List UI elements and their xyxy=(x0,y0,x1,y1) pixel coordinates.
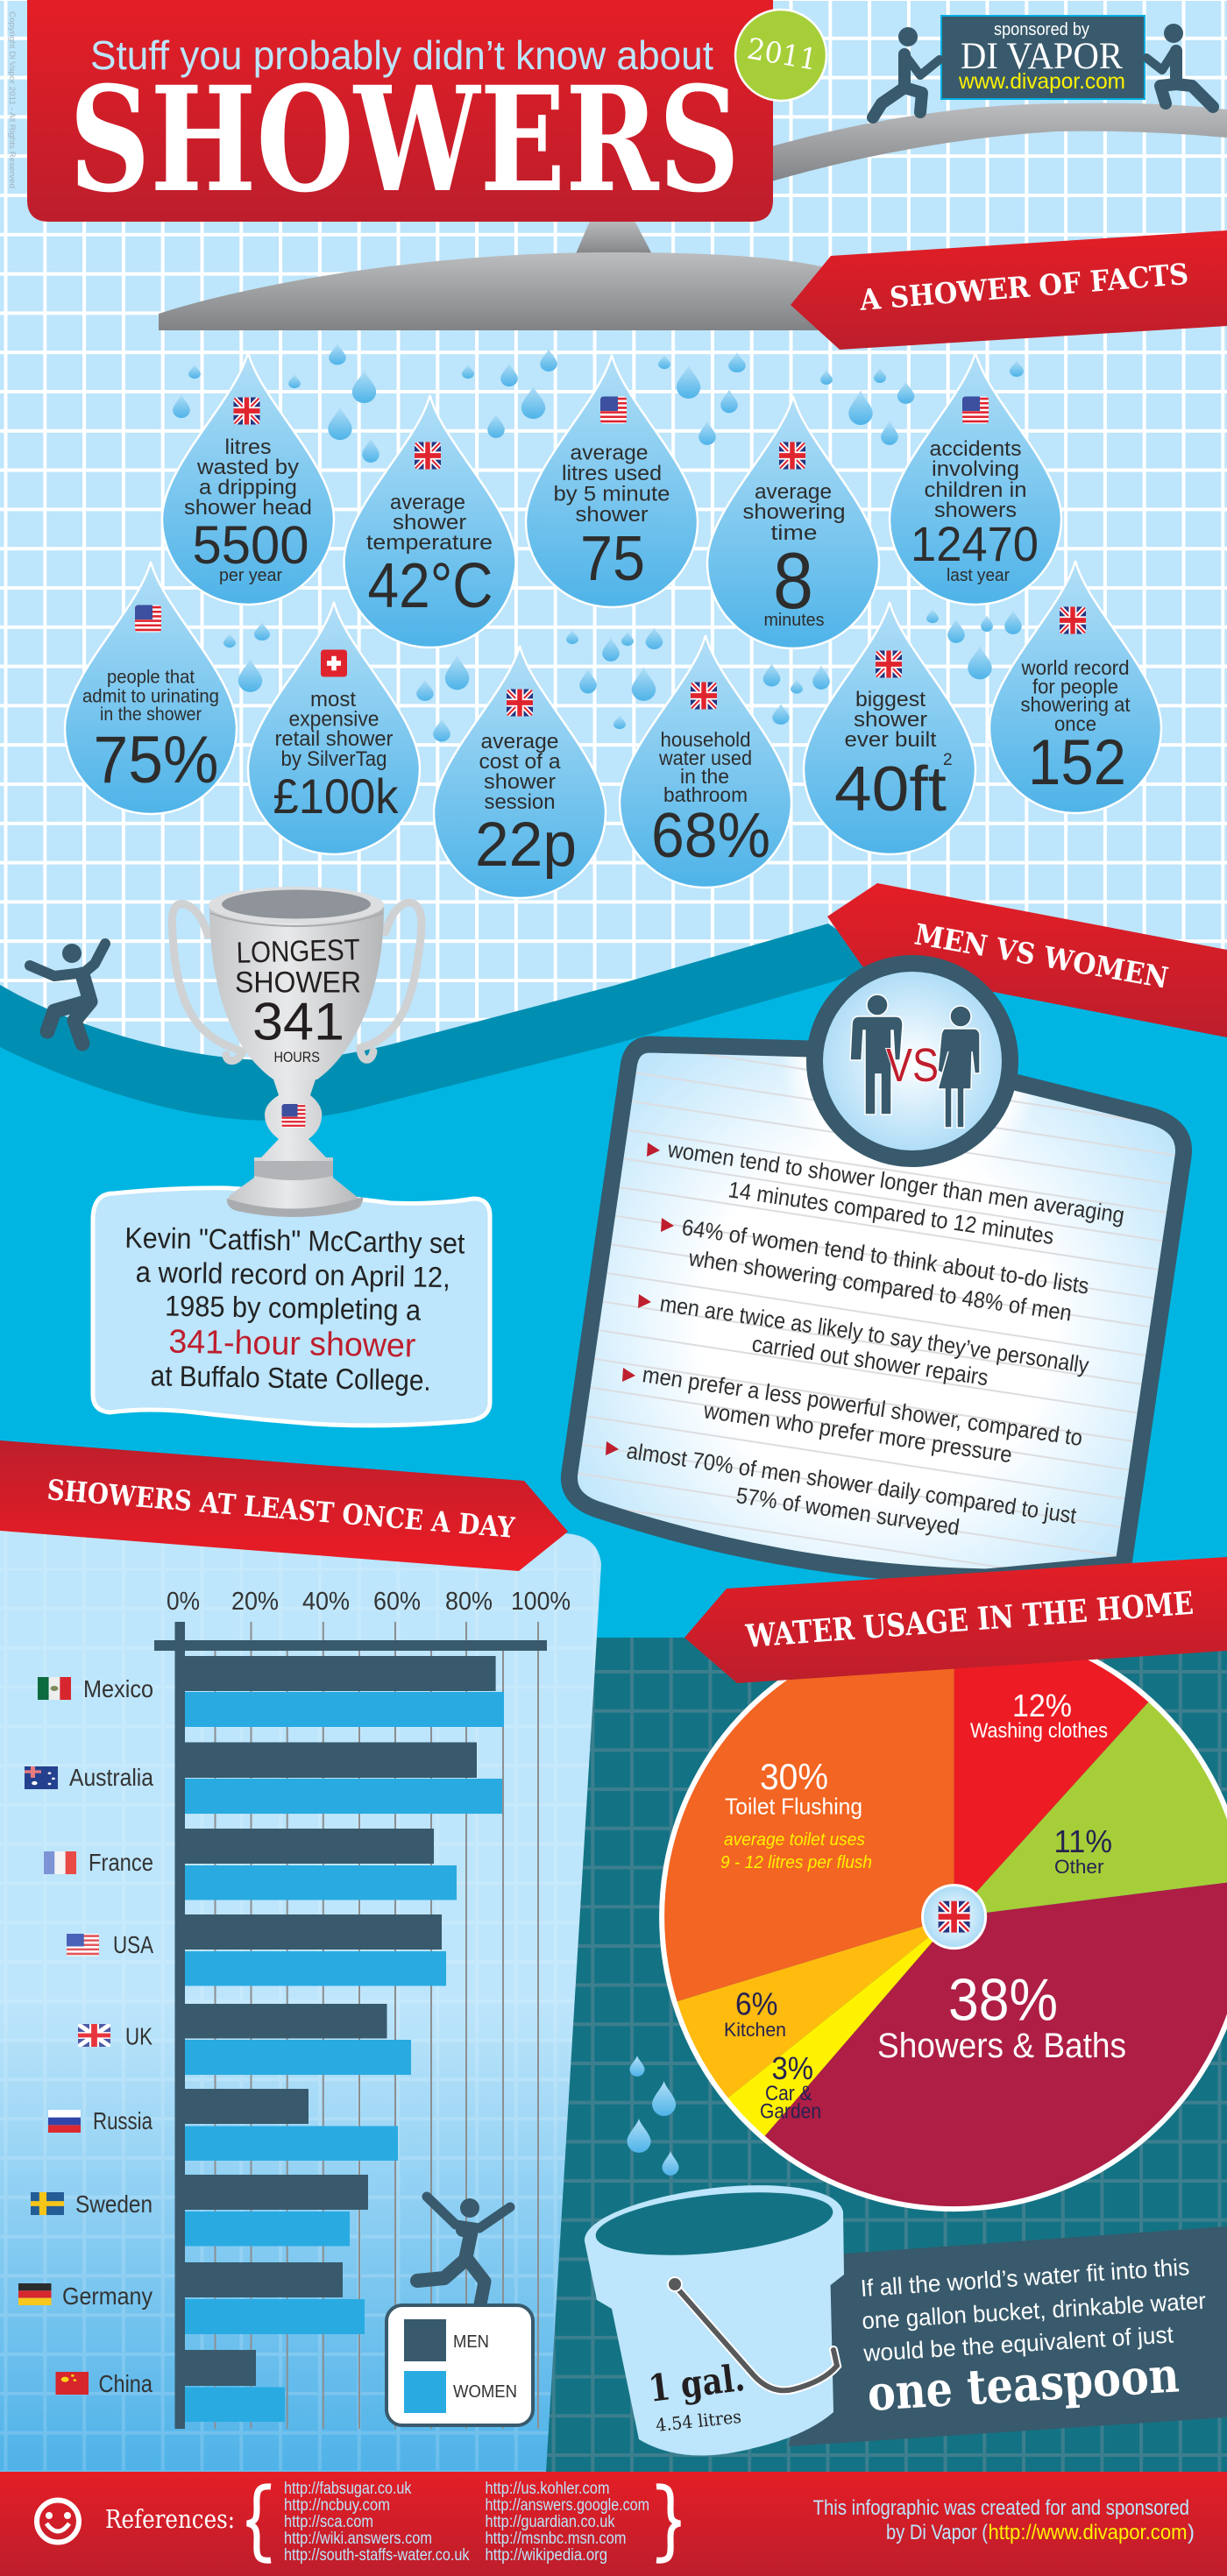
fact drop: litres used: average xyxy=(570,442,649,464)
icon: jumping figure on legend xyxy=(417,2197,510,2304)
fact drop: accidents: involving xyxy=(932,457,1019,481)
fact drop: litres used: shower xyxy=(575,503,649,527)
fact drop: expensive shower: by SilverTag xyxy=(280,747,387,771)
trophy: HOURS xyxy=(273,1049,320,1065)
fact drop: biggest shower: biggest xyxy=(855,688,926,711)
bullet list of facts: men prefer a less powerful shower, compared to xyxy=(641,1361,1084,1451)
trophy cup xyxy=(209,907,384,1079)
pie chart: 38% xyxy=(948,1966,1058,2033)
bucket: 4.54 litres xyxy=(655,2406,742,2436)
fact drop: shower temperature: average xyxy=(390,491,465,514)
reference links: http://sca.com xyxy=(284,2513,373,2531)
reference links: http://fabsugar.co.uk xyxy=(284,2480,412,2498)
fact drop: biggest shower: shower xyxy=(854,708,927,732)
falling drops above bucket xyxy=(627,2056,679,2176)
pie chart: 11% xyxy=(1053,1823,1112,1859)
ribbon: a shower of facts xyxy=(791,230,1227,350)
water wave band xyxy=(0,924,1227,1157)
ribbon: men vs women xyxy=(827,883,1227,1037)
axes xyxy=(154,1622,547,2429)
fact drop: accidents xyxy=(890,352,1061,605)
reference links: http://south-staffs-water.co.uk xyxy=(284,2546,470,2565)
axis labels: 40% xyxy=(302,1588,350,1616)
axis labels: 80% xyxy=(445,1588,493,1616)
fact drop: cost of session: session xyxy=(484,790,556,814)
fact drop: accidents: children in xyxy=(924,478,1027,502)
fact drop: world record: showering at xyxy=(1020,693,1131,716)
chart panel background xyxy=(0,1525,614,2475)
pie chart: Garden xyxy=(760,2099,821,2124)
record text panel: 1985 by completing a xyxy=(165,1290,422,1327)
axis labels: 100% xyxy=(511,1588,571,1616)
fact drop: litres wasted xyxy=(162,352,334,605)
fact drop: urinating: 75% xyxy=(93,723,219,797)
icon: figure pushing sponsor box right xyxy=(1146,24,1213,107)
fact drop: accidents: last year xyxy=(947,566,1010,585)
axis labels: 0% xyxy=(167,1588,200,1616)
chart legend: MEN xyxy=(453,2332,489,2352)
fact drop: litres wasted: wasted by xyxy=(196,456,299,479)
bullet list of facts: almost 70% of men shower daily compared to just xyxy=(625,1437,1079,1529)
pie chart: Toilet Flushing xyxy=(725,1793,862,1819)
reference links: http://guardian.co.uk xyxy=(486,2513,615,2531)
teaspoon banner: one teaspoon xyxy=(866,2346,1181,2422)
trophy: SHOWER xyxy=(235,966,361,999)
pie rim xyxy=(662,1624,1227,2209)
shower head xyxy=(159,252,841,330)
sponsor credit: http://www.divapor.com xyxy=(989,2521,1187,2544)
country labels and flags: Sweden xyxy=(75,2190,152,2218)
country labels and flags: Mexico xyxy=(83,1675,153,1702)
reference links: http://wikipedia.org xyxy=(486,2546,607,2565)
slice: showers and baths xyxy=(763,1880,1227,2209)
bullet list of facts: when showering compared to 48% of men xyxy=(686,1244,1074,1327)
title panel xyxy=(27,0,773,224)
year badge: 2011 xyxy=(745,31,819,77)
fact drop: world record: world record xyxy=(1021,656,1129,679)
bullet list of facts: carried out shower repairs xyxy=(750,1330,990,1391)
icon: braces xyxy=(247,2487,680,2560)
vs circle icon: VS xyxy=(886,1039,939,1092)
reference links: http://answers.google.com xyxy=(486,2496,649,2515)
sponsor credit xyxy=(813,2496,1195,2544)
axis labels: 60% xyxy=(373,1588,421,1616)
fact drop: world record: once xyxy=(1054,712,1096,735)
fact drop: showering time: time xyxy=(771,521,817,545)
country labels and flags: France xyxy=(89,1849,153,1876)
bullet list of facts: women tend to shower longer than men averaging xyxy=(665,1136,1126,1228)
icon: smiley xyxy=(37,2501,79,2543)
bucket xyxy=(585,2183,844,2455)
fact drop: shower temperature: 42°C xyxy=(368,551,493,621)
axis labels xyxy=(167,1588,571,1616)
pie chart: 3% xyxy=(771,2050,813,2086)
pie chart: Car & xyxy=(765,2082,812,2105)
man figure xyxy=(850,994,903,1115)
record text panel: a world record on April 12, xyxy=(135,1256,450,1293)
fact drop: litres wasted: 5500 xyxy=(193,515,309,575)
country labels and flags: Germany xyxy=(62,2282,152,2310)
record text panel: Kevin "Catfish" McCarthy set xyxy=(124,1221,465,1259)
fact drop: accidents: accidents xyxy=(929,437,1022,461)
bullet list of facts xyxy=(606,1136,1126,1540)
teaspoon banner: If all the world’s water fit into this xyxy=(860,2254,1190,2302)
fact drop: shower temperature xyxy=(344,395,515,648)
fact drop: expensive shower xyxy=(248,602,420,854)
country labels and flags xyxy=(18,1675,153,2397)
fact drop: showering time xyxy=(707,396,879,648)
fact drop: bathroom water: in the xyxy=(680,765,729,788)
slice: toilet flushing xyxy=(663,1625,954,2002)
teaspoon banner: would be the equivalent of just xyxy=(862,2321,1174,2367)
axis labels: 20% xyxy=(231,1588,279,1616)
subtitle: Stuff you probably didn’t know about xyxy=(90,32,713,78)
small falling water drops xyxy=(173,343,1024,741)
fact drop: shower temperature: temperature xyxy=(366,531,493,555)
fact drop: expensive shower: retail shower xyxy=(275,727,393,751)
sponsor box xyxy=(941,16,1145,99)
fact drop: litres wasted: shower head xyxy=(184,496,312,520)
icon: swimmer figure xyxy=(30,944,105,1044)
grid lines xyxy=(216,1622,538,2429)
fact drop: urinating: admit to urinating xyxy=(82,687,219,706)
fact drop: biggest shower xyxy=(804,602,975,854)
pie chart: Showers & Baths xyxy=(877,2027,1126,2065)
fact drop: litres used: litres used xyxy=(562,462,662,485)
fact drop: accidents: 12470 xyxy=(911,516,1039,571)
trophy: 341 xyxy=(252,992,344,1051)
fact drop: cost of session: 22p xyxy=(475,810,577,880)
record text panel: at Buffalo State College. xyxy=(150,1359,431,1397)
fact drop: shower temperature: shower xyxy=(393,511,466,534)
fact drop: urinating: in the shower xyxy=(100,704,202,725)
pie chart: Washing clothes xyxy=(970,1719,1108,1743)
sponsor credit: ) xyxy=(1188,2521,1195,2544)
fact drop: bathroom water: household xyxy=(661,728,750,751)
fact drop: litres wasted: per year xyxy=(219,566,282,585)
reference links: http://ncbuy.com xyxy=(284,2496,390,2515)
water body xyxy=(0,968,1227,1647)
fact drop: showering time: minutes xyxy=(764,611,824,630)
copyright notice: Copyright Di Vapor 2011 - All Rights Reserved xyxy=(7,11,17,188)
fact drop: urinating: people that xyxy=(107,668,195,687)
pie chart: 9 - 12 litres per flush xyxy=(720,1853,872,1872)
country labels and flags: Russia xyxy=(93,2107,152,2134)
fact drop: bathroom water xyxy=(620,635,791,888)
bucket handle xyxy=(668,2277,837,2390)
fact drop: biggest shower: 2 xyxy=(943,751,953,769)
fact drop: showering time: average xyxy=(755,480,832,504)
pie chart xyxy=(662,1624,1227,2209)
references heading: References: xyxy=(105,2504,235,2534)
ribbon: showers at least once a day: SHOWERS AT LEAST ONCE A DAY xyxy=(46,1473,517,1545)
bullet list of facts: women who prefer more pressure xyxy=(701,1397,1014,1468)
record text panel xyxy=(93,1188,490,1426)
fact drop: bathroom water: 68% xyxy=(651,801,770,871)
icon: figure pushing sponsor box left xyxy=(873,27,940,117)
teaspoon banner xyxy=(789,2226,1227,2446)
fact drop: litres used: 75 xyxy=(580,524,645,594)
men bars xyxy=(185,1656,496,2386)
trophy handles xyxy=(172,902,422,1061)
shower arm xyxy=(762,103,1227,184)
fact drop: world record xyxy=(989,561,1161,813)
slice: washing clothes xyxy=(954,1625,1150,1917)
country labels and flags: China xyxy=(98,2370,152,2397)
pie labels: 12% xyxy=(1012,1688,1072,1723)
slice: car and garden xyxy=(727,1917,954,2138)
fact drop: expensive shower: £100k xyxy=(273,768,399,824)
pie chart: Kitchen xyxy=(724,2019,786,2041)
teal tiled section xyxy=(543,1638,1227,2472)
ribbon: men vs women: MEN VS WOMEN xyxy=(912,916,1171,995)
fact drop: world record: for people xyxy=(1032,675,1118,697)
bucket: 1 gal. xyxy=(646,2356,747,2410)
fact drop: cost of session: cost of a xyxy=(479,750,561,774)
shower stem xyxy=(575,219,653,256)
bullet list of facts: 14 minutes compared to 12 minutes xyxy=(727,1176,1056,1249)
fact drop: litres used: by 5 minute xyxy=(554,482,670,506)
year badge xyxy=(735,10,826,101)
woman figure xyxy=(938,1006,980,1128)
fact drop: biggest shower: ever built xyxy=(845,728,937,752)
fact drop: litres wasted: litres xyxy=(224,435,272,459)
chart legend xyxy=(387,2305,533,2425)
footer xyxy=(0,2472,1227,2576)
reference links: http://msnbc.msn.com xyxy=(486,2530,626,2548)
sponsor box: DI VAPOR xyxy=(961,36,1123,77)
pie centre flag xyxy=(923,1886,986,1949)
trophy stem and base xyxy=(228,1079,361,1217)
fact drop: expensive shower: most xyxy=(310,688,356,711)
country labels and flags: Australia xyxy=(69,1764,153,1791)
men vs women card xyxy=(561,1036,1192,1579)
trophy: LONGEST xyxy=(236,933,360,970)
bullet list of facts: men are twice as likely to say they’ve personally xyxy=(658,1290,1090,1378)
ribbon: water usage in the home xyxy=(684,1557,1227,1683)
fact drop: bathroom water: bathroom xyxy=(663,783,748,806)
bullet list of facts: 57% of women surveyed xyxy=(734,1482,961,1540)
main title: SHOWERS xyxy=(69,54,740,224)
ribbon: showers at least once a day xyxy=(0,1440,568,1571)
reference links: http://wiki.answers.com xyxy=(284,2530,432,2548)
country labels and flags: USA xyxy=(113,1931,153,1958)
ribbon: a shower of facts: A SHOWER OF FACTS xyxy=(858,257,1189,317)
pie chart: 6% xyxy=(735,1985,778,2022)
record text panel: 341-hour shower xyxy=(168,1324,416,1365)
slice: kitchen xyxy=(675,1917,954,2099)
reference links: http://us.kohler.com xyxy=(486,2480,610,2498)
country labels and flags: UK xyxy=(125,2022,152,2050)
fact drop: biggest shower: 40ft xyxy=(834,754,947,824)
flag on trophy xyxy=(282,1104,305,1128)
fact drop: accidents: showers xyxy=(934,499,1017,522)
vs circle icon xyxy=(815,964,1010,1158)
fact drop: litres wasted: a dripping xyxy=(199,476,297,499)
slice: other xyxy=(954,1701,1227,1917)
bullet list of facts: 64% of women tend to think about to-do lists xyxy=(680,1214,1091,1299)
fact drop: bathroom water: water used xyxy=(658,747,752,769)
pie chart: average toilet uses xyxy=(724,1830,865,1850)
fact drop: showering time: 8 xyxy=(773,537,813,626)
fact drop: expensive shower: expensive xyxy=(289,708,379,731)
sponsor box: www.divapor.com xyxy=(958,69,1125,94)
fact drop: showering time: showering xyxy=(743,500,845,524)
fact drop: litres used xyxy=(526,355,698,607)
reference links xyxy=(284,2480,649,2565)
chart legend: WOMEN xyxy=(453,2382,517,2402)
fact drop: cost of session: average xyxy=(480,730,559,754)
pie chart: 30% xyxy=(760,1756,828,1797)
sponsor credit: by Di Vapor ( xyxy=(886,2521,988,2544)
teaspoon banner: one gallon bucket, drinkable water xyxy=(862,2288,1207,2334)
fact drop: cost of session: shower xyxy=(484,770,556,794)
sponsor box: sponsored by xyxy=(994,20,1089,39)
fact drop: urinating xyxy=(65,562,237,814)
fact drop: cost of session xyxy=(434,646,606,898)
women bars xyxy=(185,1692,504,2422)
pie chart: Other xyxy=(1054,1856,1104,1878)
fact drop: world record: 152 xyxy=(1028,727,1126,798)
bar chart xyxy=(18,1588,571,2429)
trophy xyxy=(172,887,422,1217)
